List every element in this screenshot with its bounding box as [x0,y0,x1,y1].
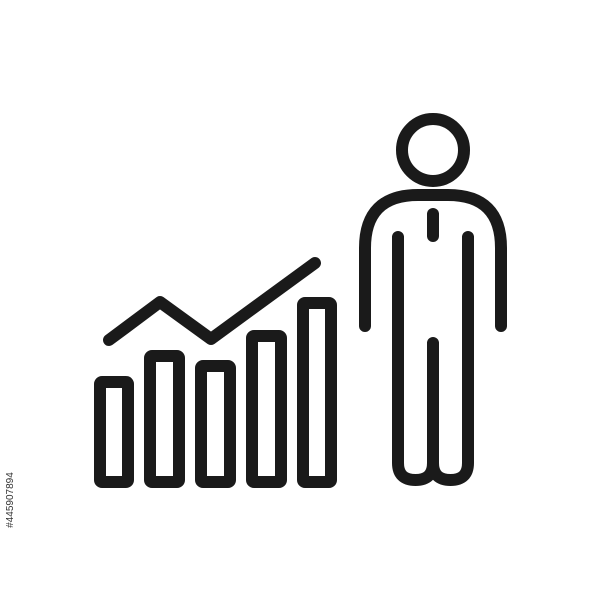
tie [427,214,439,236]
head [402,119,464,181]
stock id text: #445907894 [5,472,16,528]
legs [398,237,468,480]
person [365,119,501,480]
bar chart [100,303,331,482]
trend line [109,263,315,340]
shoulders and arms [365,195,501,326]
